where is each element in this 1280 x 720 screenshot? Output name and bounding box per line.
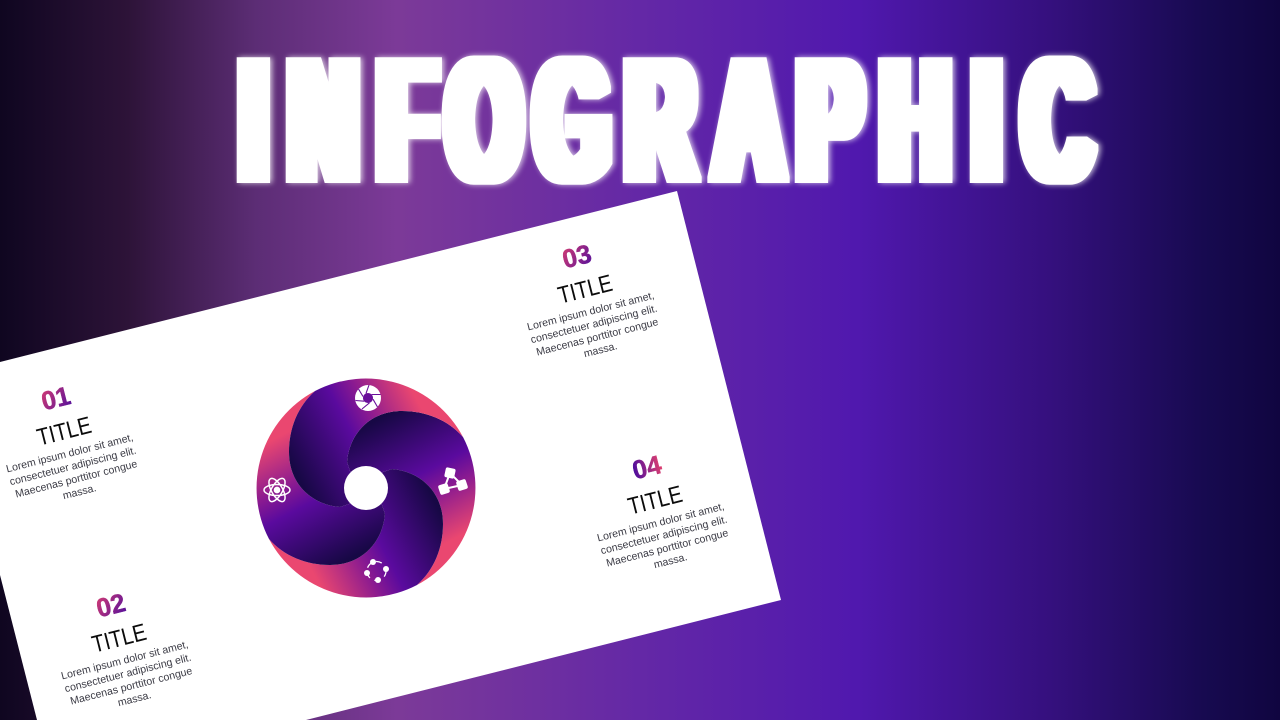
segment: bottom blade bbox=[269, 469, 443, 597]
body 02: massa. bbox=[117, 689, 153, 709]
body 03: Lorem ipsum dolor sit amet, bbox=[526, 290, 656, 333]
text block 01 bbox=[0, 368, 144, 514]
title: INFOGRAPHIC bbox=[240, 23, 1091, 217]
icon: linked cubes bbox=[438, 467, 468, 495]
body 02: Maecenas porttitor congue bbox=[69, 665, 194, 708]
number 02: 02 bbox=[93, 587, 128, 623]
icon: atom bbox=[264, 476, 290, 504]
heading 01: TITLE bbox=[34, 412, 94, 452]
body 04: Lorem ipsum dolor sit amet, bbox=[596, 501, 726, 544]
icon: camera shutter bbox=[355, 385, 381, 411]
body 03: consectetuer adipiscing elit. bbox=[529, 303, 659, 346]
body 01: consectetuer adipiscing elit. bbox=[8, 445, 138, 488]
body 02: consectetuer adipiscing elit. bbox=[63, 652, 193, 695]
body 04: consectetuer adipiscing elit. bbox=[599, 514, 729, 557]
segment: left blade bbox=[257, 391, 385, 565]
heading 03: TITLE bbox=[555, 270, 615, 310]
body 03: Maecenas porttitor congue bbox=[535, 316, 660, 359]
body 01: Lorem ipsum dolor sit amet, bbox=[5, 432, 135, 475]
icon: ring of nodes bbox=[364, 559, 389, 583]
segment: top-right blade bbox=[347, 411, 475, 585]
heading 02: TITLE bbox=[89, 619, 149, 659]
body 04: massa. bbox=[653, 551, 689, 571]
heading 04: TITLE bbox=[625, 481, 685, 521]
body 01: massa. bbox=[62, 482, 98, 502]
number 04: 04 bbox=[629, 449, 665, 485]
body 03: massa. bbox=[583, 340, 619, 360]
body 01: Maecenas porttitor congue bbox=[14, 458, 139, 501]
segment: top-left blade bbox=[289, 379, 463, 507]
center hole bbox=[344, 466, 388, 510]
text block 04 bbox=[580, 437, 735, 583]
number 03: 03 bbox=[559, 238, 594, 274]
panel: tilted white slide bbox=[0, 191, 781, 720]
body 02: Lorem ipsum dolor sit amet, bbox=[60, 639, 190, 682]
text block 03 bbox=[510, 226, 665, 372]
donut swirl chart bbox=[257, 379, 475, 597]
text block 02 bbox=[44, 575, 199, 720]
body 04: Maecenas porttitor congue bbox=[605, 527, 730, 570]
number 01: 01 bbox=[38, 380, 73, 416]
